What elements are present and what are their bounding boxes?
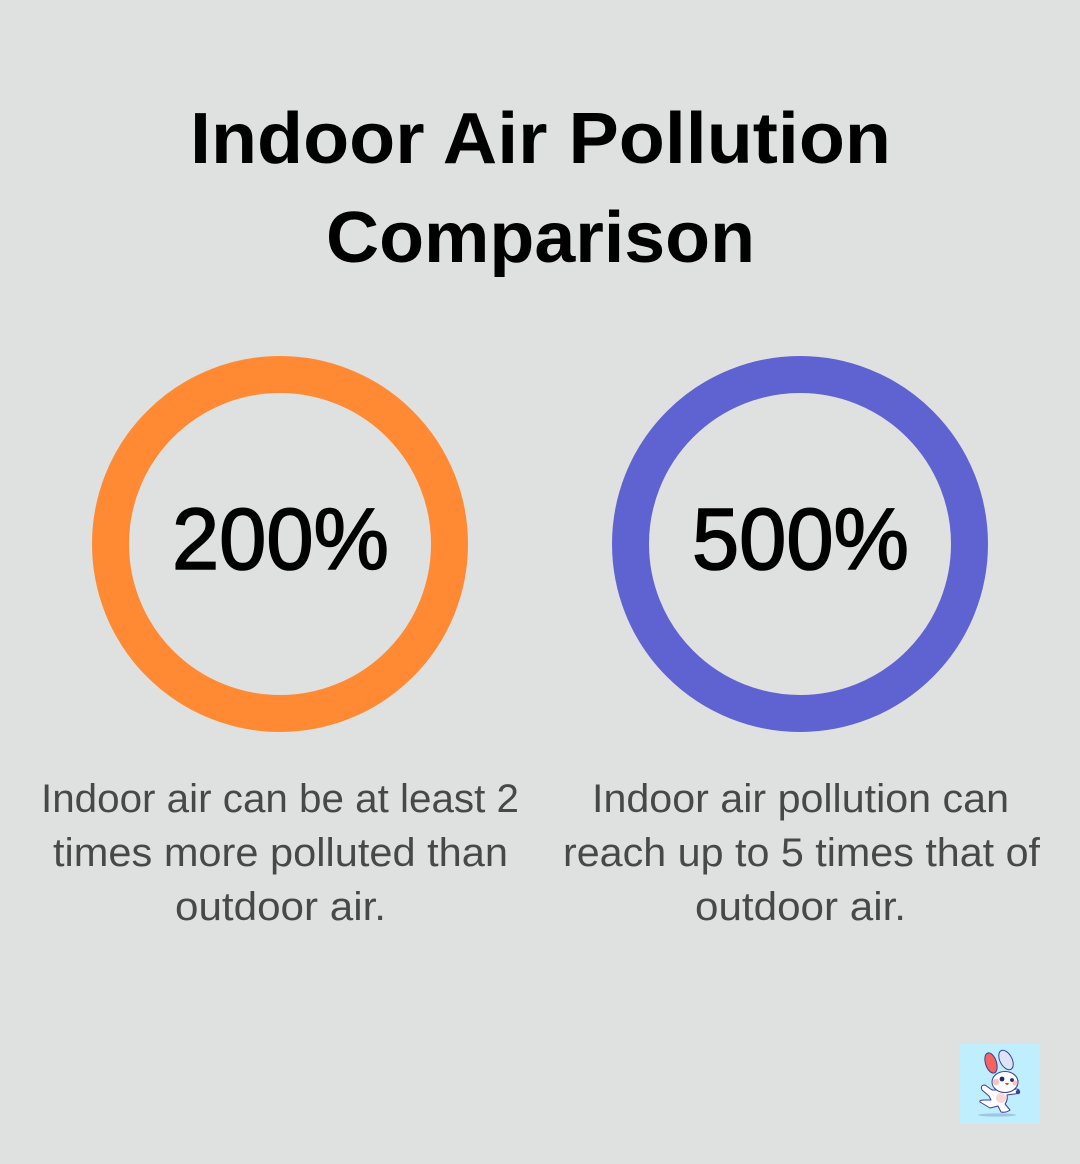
panel: 500% statistic	[563, 374, 1041, 929]
description: 200%: times more polluted than	[53, 831, 508, 875]
icon: running rabbit logo	[960, 1044, 1040, 1124]
description: 200%: Indoor air can be at least 2	[41, 777, 519, 821]
purple ring	[630, 374, 970, 714]
orange ring	[110, 374, 450, 714]
description: 200%	[41, 777, 519, 929]
description: 200%: outdoor air.	[175, 885, 386, 929]
panel: 200% statistic	[41, 374, 519, 929]
value: 200%: 200%	[172, 491, 389, 588]
description: 500%	[563, 777, 1041, 929]
description: 500%: reach up to 5 times that of	[563, 831, 1041, 875]
value: 500%: 500%	[692, 491, 909, 588]
title	[190, 99, 891, 278]
description: 500%: Indoor air pollution can	[592, 777, 1009, 821]
description: 500%: outdoor air.	[695, 885, 906, 929]
title: Indoor Air Pollution	[190, 99, 891, 179]
title: Comparison	[326, 198, 755, 278]
